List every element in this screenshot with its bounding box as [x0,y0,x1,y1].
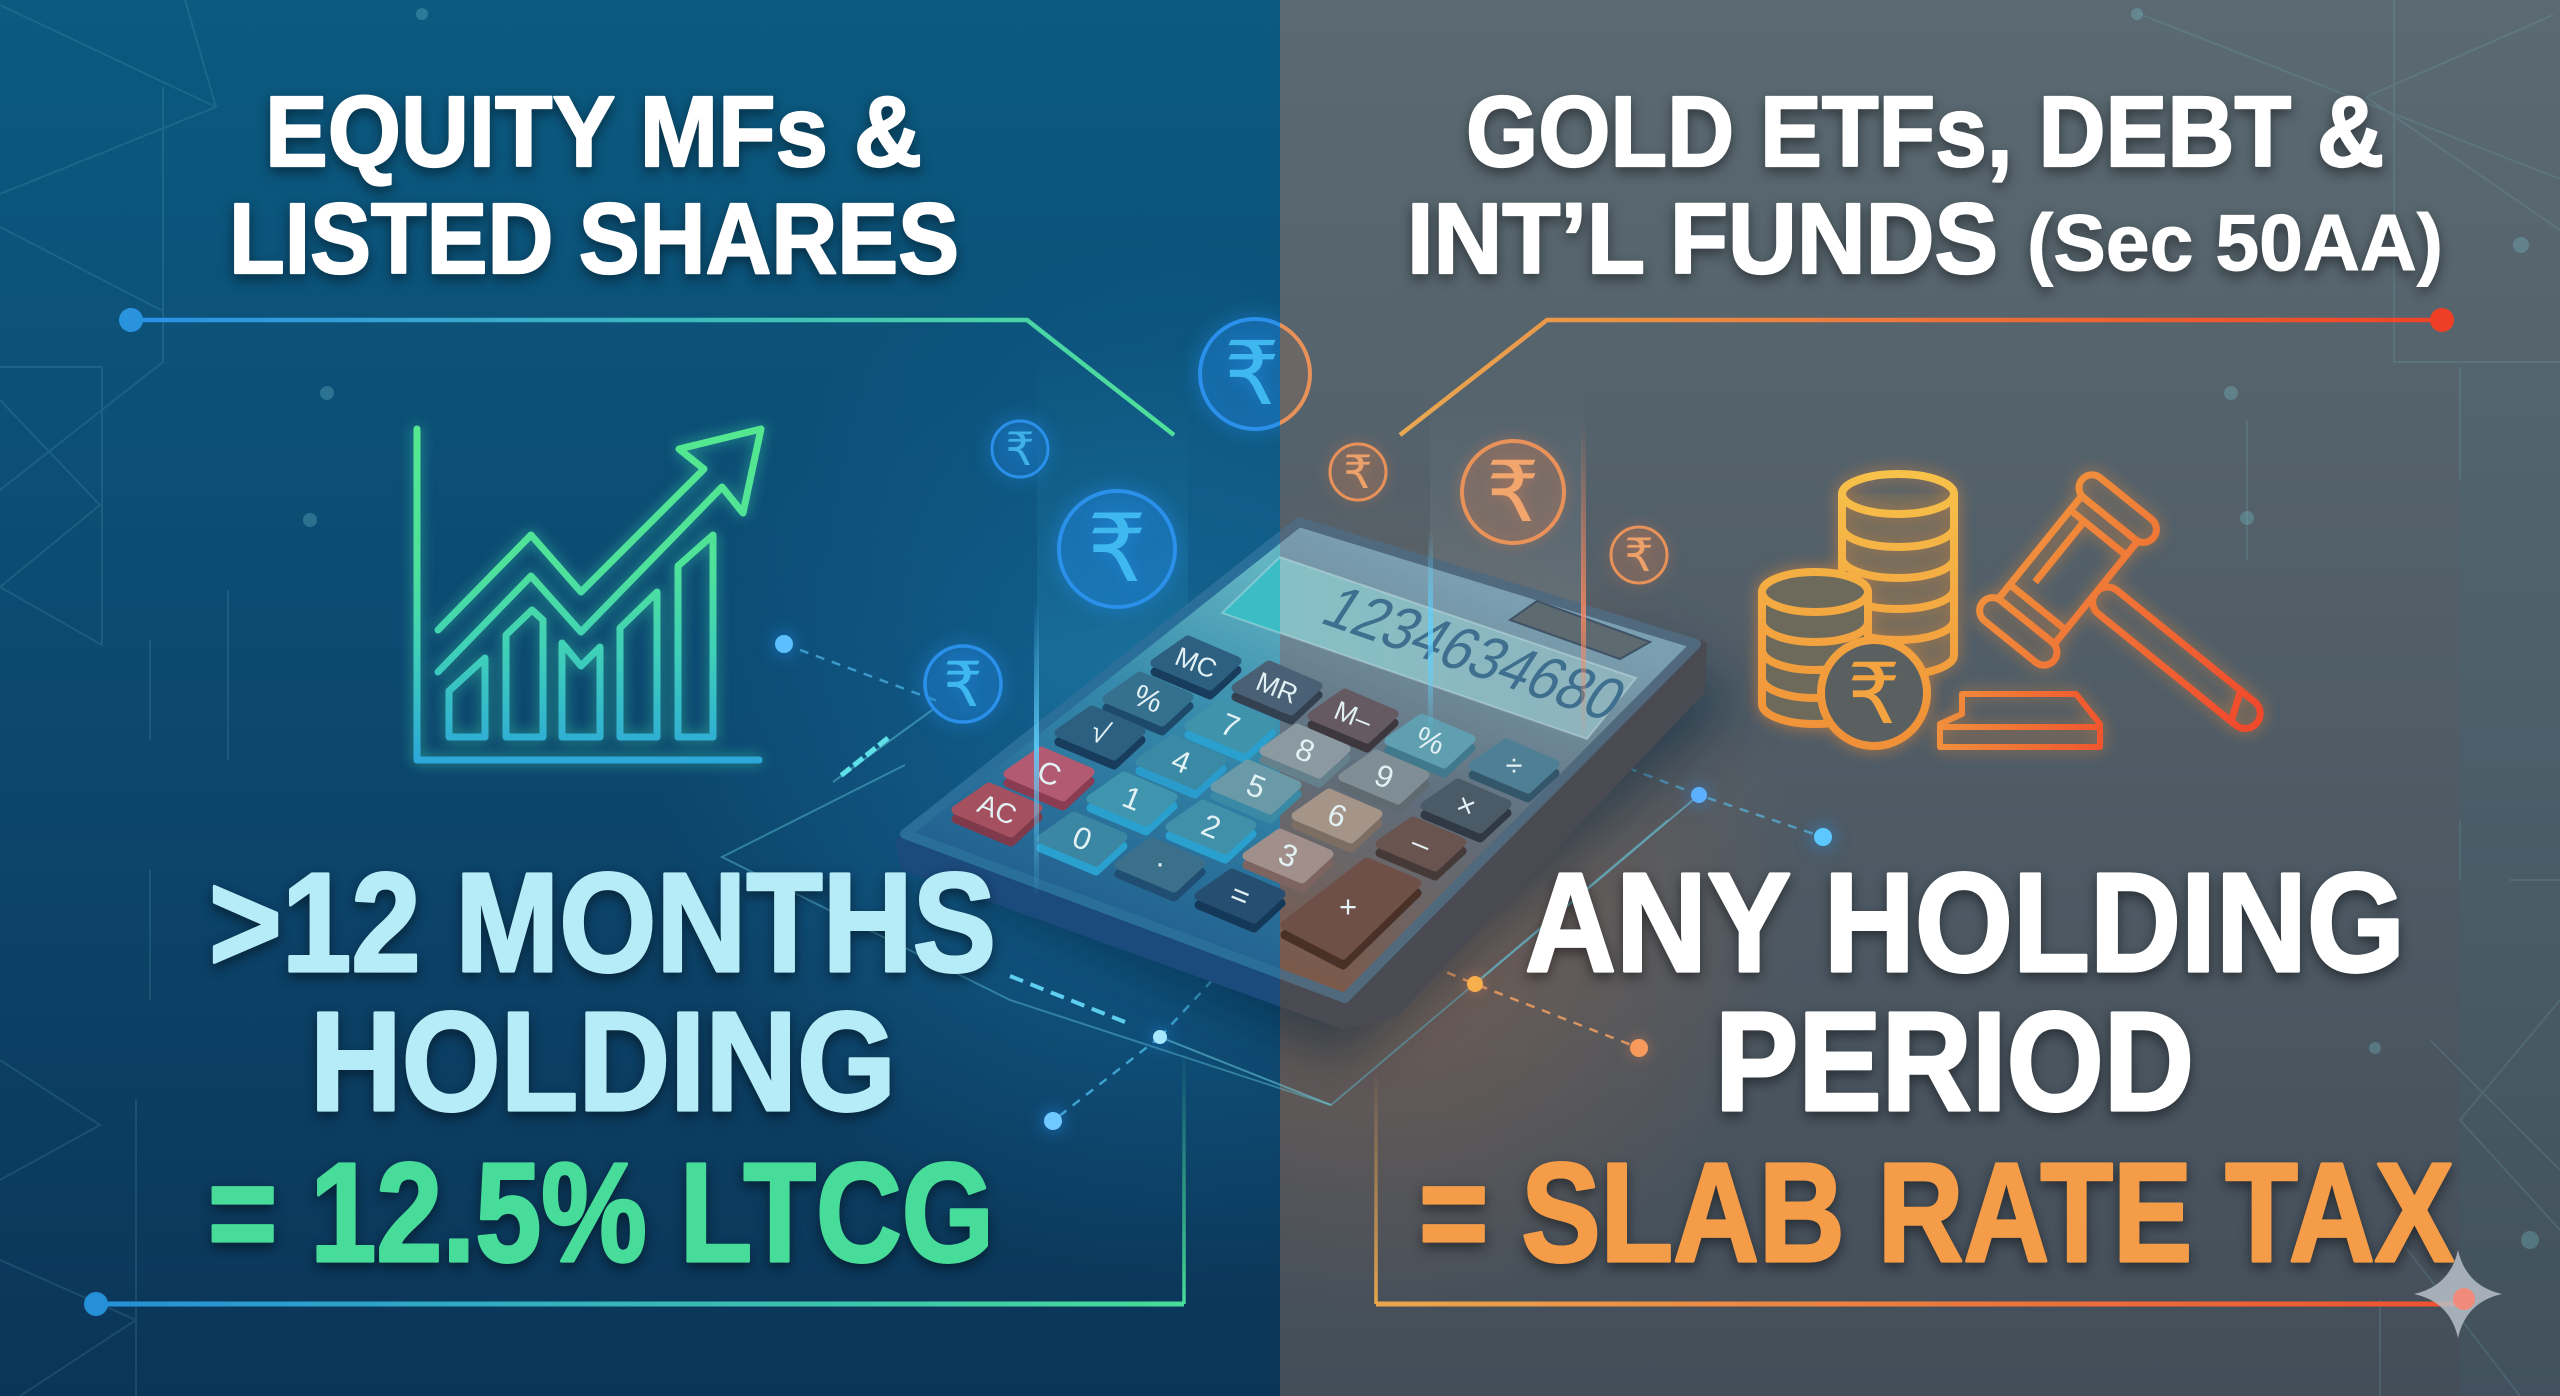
top right connector line [1400,308,2454,435]
condition line 2: PERIOD [1715,982,2194,1140]
key: percent left: % [1129,677,1168,720]
key: 7 [1189,703,1271,758]
chart rising arrow [438,429,761,672]
key: C [1008,751,1090,806]
key: 1 [1091,776,1173,831]
key: 4 [1140,739,1222,794]
sparkle watermark [2414,1250,2502,1338]
heading line 1: GOLD ETFs, DEBT & [1466,76,2384,188]
icon: orange rupee coin small left: ₹ [1343,446,1373,498]
key: percent left [1107,676,1189,731]
icon: gavel [1940,470,2315,794]
key: plus [1285,862,1417,965]
key: multiply: × [1451,786,1481,825]
solar panel [1510,601,1650,659]
key: divide [1473,743,1555,798]
icon: rupee coin lower [925,646,1001,722]
icon: rupee coin small: ₹ [1005,423,1035,475]
background: right grey panel [1280,0,2560,1396]
section reference: (Sec 50AA) [2027,198,2443,287]
key: M- [1312,693,1394,748]
left result text: = 12.5% LTCG [208,1133,994,1291]
display digits: 1234634680 [1310,574,1638,734]
key: 6: 6 [1323,796,1352,835]
light strips behind calculator [1037,350,1583,910]
condition line 1: ANY HOLDING [1525,843,2405,1001]
key: 2 [1170,804,1252,859]
key: 5 [1215,764,1297,819]
light beams [1034,420,1586,900]
chart axes [417,429,759,760]
key: 3: 3 [1274,836,1303,875]
key: MR: MR [1252,666,1302,710]
icon: orange rupee coin large [1462,441,1564,543]
gavel sound block [1940,694,2100,747]
right condition text [1525,843,2405,1140]
icon: rupee coin medium: ₹ [1087,496,1147,601]
key: percent top: % [1411,719,1450,762]
big rupee coin: ₹ [1847,647,1901,741]
key: minus: – [1407,824,1436,863]
key: square root [1059,710,1141,765]
icon: stacked gold coins [1762,474,1954,746]
chart bars [449,535,713,737]
key: C: C [1032,753,1066,794]
key: square root: √ [1086,713,1115,752]
key: minus [1380,821,1462,876]
condition line 2: HOLDING [310,982,896,1140]
icon: rupee coin lower: ₹ [943,651,983,720]
icon: rupee coin small [992,421,1048,477]
key: 1: 1 [1118,779,1147,818]
key: plus: + [1339,889,1357,924]
key: equals [1199,873,1281,928]
key: 9: 9 [1370,757,1399,796]
key: decimal point [1119,842,1201,897]
icon: orange rupee coin large: ₹ [1486,445,1540,539]
condition line 1: >12 MONTHS [209,843,996,1001]
icon: orange rupee coin small right: ₹ [1624,529,1654,581]
key: AC: AC [973,788,1021,831]
heading line 2: INT’L FUNDS [1407,183,1998,295]
calculator shadow [940,640,1740,1060]
icon: orange rupee coin small right [1611,527,1667,583]
key: 5: 5 [1242,767,1271,806]
key: 4: 4 [1167,742,1196,781]
key: 2: 2 [1197,807,1226,846]
top left connector line [119,308,1174,435]
key: percent top [1389,718,1471,773]
key: 3 [1247,833,1329,888]
calculator [901,522,1740,1060]
key: 7: 7 [1216,706,1245,745]
front coin stack [1762,572,1868,724]
key: 6 [1296,793,1378,848]
right heading [1407,76,2443,295]
key: MC [1155,640,1237,695]
icon: rupee coin large top, split blue and orange: ₹ [1224,324,1280,423]
left heading [229,76,959,295]
icon: orange rupee coin small left [1330,444,1386,500]
key: 8: 8 [1291,731,1320,770]
key: MR [1236,665,1318,720]
tall coin stack [1842,474,1954,680]
background: left blue panel [0,0,1280,1396]
key: decimal point: · [1155,845,1165,880]
key: divide: ÷ [1505,748,1523,783]
key: 0 [1041,816,1123,871]
icon: rupee coin medium [1059,491,1175,607]
icon: rupee coin large top, split blue and orange [1200,319,1310,429]
calculator body left half [896,530,1280,1006]
heading line 1: EQUITY MFs & [265,76,922,188]
gavel hammer [1974,470,2315,794]
key: equals: = [1225,876,1255,915]
key: MC: MC [1171,641,1221,685]
key: 8 [1264,728,1346,783]
bottom left bracket line [84,1050,1184,1316]
key: 0: 0 [1068,819,1097,858]
glowing network nodes [775,635,1832,1130]
icon: rising bar chart with arrow [417,429,761,760]
calculator body right half [1280,517,1707,1028]
key: multiply [1425,783,1507,838]
bottom right bracket line [1376,1070,2464,1304]
network lines and platform under calculator [722,644,1823,1121]
big rupee coin [1821,640,1927,746]
display [1222,557,1636,739]
key: M-: M– [1330,695,1376,737]
left condition text [209,843,996,1140]
key: AC [956,787,1038,842]
key: 9 [1343,754,1425,809]
heading line 2: LISTED SHARES [229,183,959,295]
